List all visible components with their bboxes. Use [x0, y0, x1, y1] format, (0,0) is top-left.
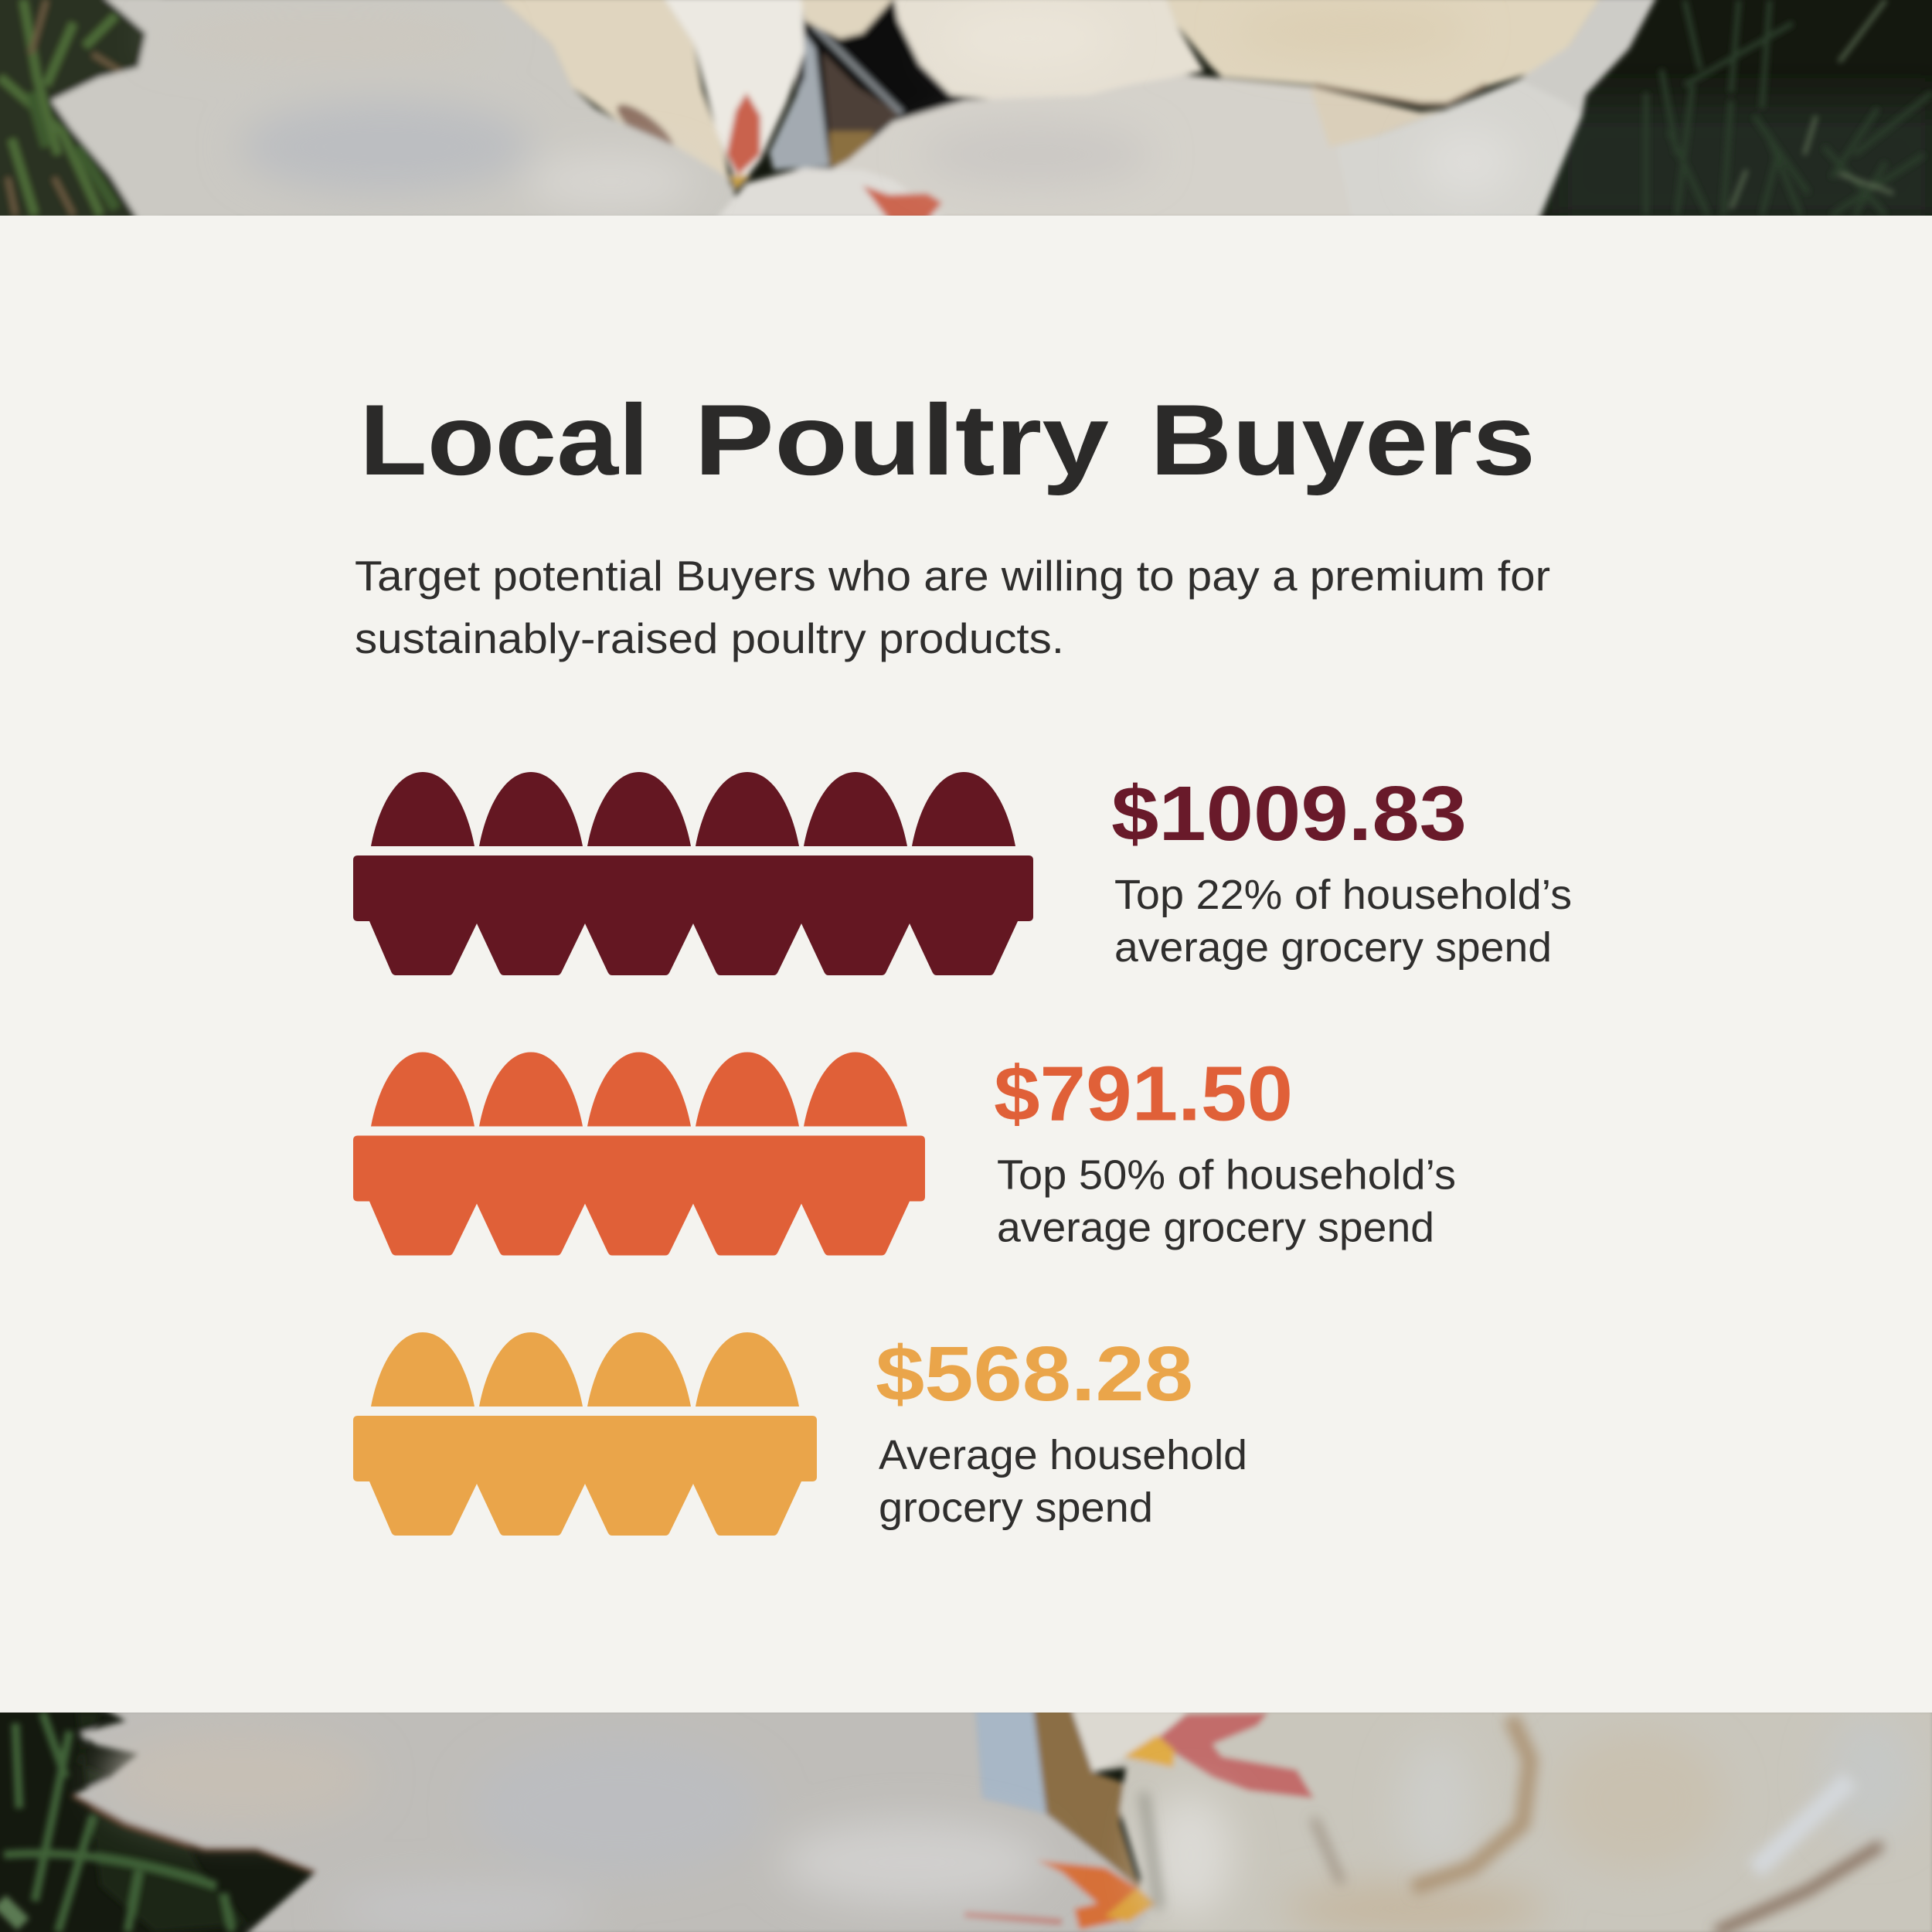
chicken cream right [1166, 0, 1601, 107]
feather streaks bottom [1144, 1717, 1882, 1932]
stat: $791.50 [994, 1051, 1456, 1250]
shading on feathers bottom [108, 1716, 1917, 1932]
egg carton row 3: four eggs [353, 1332, 817, 1536]
left big chicken [73, 1708, 1157, 1932]
title: Local [359, 383, 649, 496]
egg carton row 2: five eggs [353, 1053, 925, 1255]
chicken lower right [734, 75, 1391, 220]
pole and ground [975, 1708, 1046, 1814]
stat: $568.28: $568.28 [876, 1331, 1193, 1417]
chicken head [662, 0, 804, 188]
stat: $1009.83: $1009.83 [1111, 770, 1467, 857]
stat: $568.28: grocery spend [879, 1485, 1153, 1531]
stat: $1009.83: Top 22% of household’s [1114, 872, 1572, 918]
panel: cream background [0, 216, 1932, 1713]
stat: $568.28 [876, 1331, 1247, 1531]
chicken big left [51, 0, 738, 220]
right chicken [1071, 1708, 1932, 1932]
stat: $791.50: $791.50 [994, 1051, 1293, 1138]
intro text [355, 552, 1550, 662]
grass bottom left [0, 1713, 247, 1932]
stat: $568.28: Average household [879, 1432, 1247, 1478]
stat: $791.50: Top 50% of household’s [997, 1151, 1456, 1198]
chicken small front [716, 168, 947, 220]
chicken cream centre [893, 0, 1204, 100]
intro text: Target potential Buyers who are willing to pay a premium for [355, 552, 1550, 600]
stat: $791.50: average grocery spend [997, 1204, 1434, 1250]
grass right [1646, 0, 1932, 215]
photo band: chickens top [0, 0, 1932, 232]
lower comb [1036, 1860, 1157, 1930]
egg carton row 1: six eggs [353, 772, 1033, 975]
ground gap and feeder [796, 0, 1005, 182]
chicken wing right [1437, 0, 1657, 220]
stat: $1009.83: average grocery spend [1114, 924, 1552, 971]
photo band: chickens bottom [0, 1708, 1932, 1932]
title: Buyers [1150, 383, 1536, 496]
intro text: sustainably-raised poultry products. [355, 614, 1064, 662]
title: Poultry [694, 383, 1109, 496]
chicken small top [801, 0, 896, 39]
stat: $1009.83 [1111, 770, 1572, 971]
chicken cream back [497, 0, 730, 185]
right chicken comb and beak [1159, 1713, 1314, 1798]
grass left [0, 0, 162, 224]
shading on feathers top [155, 4, 1515, 209]
